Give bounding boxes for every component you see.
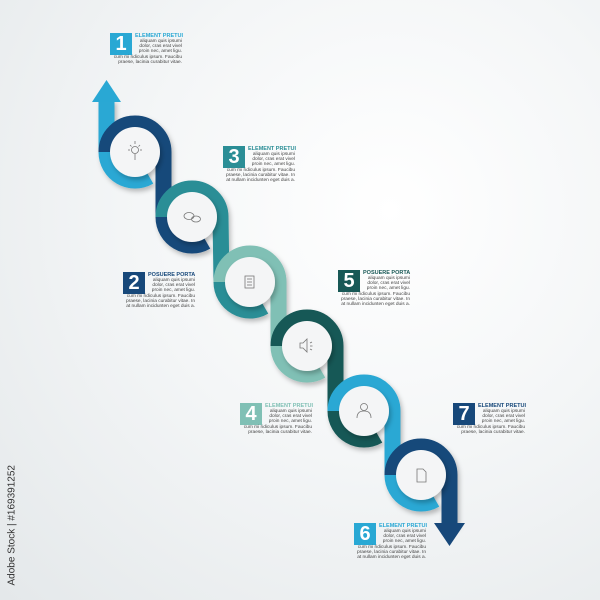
text block 7: 7: [458, 403, 470, 425]
icon: bulb: [128, 141, 142, 160]
text block 4: aliquam quis ipsumi: [270, 409, 312, 414]
text block 3: praese, lacinia curabitur vitae. In: [226, 172, 295, 178]
text block 7: praese, lacinia curabitur vitae.: [461, 430, 525, 434]
text block 3: cum mi ridiculus ipsum. Faucibu: [227, 168, 295, 172]
text block 5: [338, 270, 410, 306]
text block 7: [453, 403, 526, 434]
text block 6: dolor, cras erat vivel: [383, 534, 426, 539]
text block 6: 6: [359, 523, 371, 545]
text block 4: ELEMENT PRETUI: [265, 403, 313, 409]
text block 1: aliquam quis ipsumi: [140, 39, 182, 44]
text block 5: aliquam quis ipsumi: [368, 276, 410, 281]
text block 6: at nullam incidunten eget duis a.: [357, 554, 426, 560]
text block 1: proin nec, amet ligu.: [139, 49, 182, 54]
text block 7: aliquam quis ipsumi: [483, 409, 525, 414]
text block 3: at nullam incidunten eget duis a.: [226, 178, 295, 182]
text block 1: ELEMENT PRETUI: [135, 33, 183, 39]
text block 7: cum mi ridiculus ipsum. Faucibu: [457, 424, 525, 430]
text block 6: [354, 523, 427, 560]
icon: page: [417, 469, 426, 482]
arrow: down head: [434, 523, 465, 546]
text block 4: proin nec, amet ligu.: [269, 419, 312, 424]
text block 5: POSUERE PORTA: [363, 270, 410, 276]
text block 2: 2: [128, 272, 140, 294]
icon: person: [357, 404, 371, 418]
text block 6: aliquam quis ipsumi: [384, 529, 426, 534]
text block 5: proin nec, amet ligu.: [367, 286, 410, 291]
text block 2: aliquam quis ipsumi: [153, 278, 195, 283]
text block 2: at nullam incidunten eget duis a.: [126, 304, 195, 308]
text block 2: dolor, cras erat vivel: [152, 283, 195, 288]
text block 2: cum mi ridiculus ipsum. Faucibu: [127, 294, 195, 298]
watermark id text: Adobe Stock | #169391252: [6, 465, 18, 586]
icon: document: [245, 276, 254, 288]
text block 6: proin nec, amet ligu.: [383, 539, 426, 544]
text block 5: at nullam incidunten eget duis a.: [341, 302, 410, 306]
text block 4: [240, 403, 313, 434]
text block 4: 4: [245, 403, 257, 425]
icon: chat: [184, 212, 200, 222]
text block 3: ELEMENT PRETUI: [248, 146, 296, 152]
text block 7: dolor, cras erat vivel: [482, 414, 525, 419]
text block 6: praese, lacinia curabitur vitae. In: [357, 550, 426, 554]
text block 3: proin nec, amet ligu.: [252, 162, 295, 167]
text block 7: proin nec, amet ligu.: [482, 419, 525, 424]
text block 2: praese, lacinia curabitur vitae. In: [126, 298, 195, 304]
text block 6: ELEMENT PRETUI: [379, 523, 427, 529]
text block 1: dolor, cras erat vivel: [139, 44, 182, 49]
text block 5: cum mi ridiculus ipsum. Faucibu: [342, 292, 410, 296]
text block 5: praese, lacinia curabitur vitae. In: [341, 296, 410, 302]
text block 5: 5: [343, 270, 355, 292]
text block 3: dolor, cras erat vivel: [252, 157, 295, 162]
text block 1: cum mi ridiculus ipsum. Faucibu: [114, 54, 182, 60]
text block 3: [223, 146, 296, 182]
text block 4: dolor, cras erat vivel: [269, 414, 312, 419]
text block 3: aliquam quis ipsumi: [253, 152, 295, 157]
text block 2: [123, 272, 196, 308]
text block 4: cum mi ridiculus ipsum. Faucibu: [244, 424, 312, 430]
text block 6: cum mi ridiculus ipsum. Faucibu: [358, 544, 426, 550]
text block 5: dolor, cras erat vivel: [367, 281, 410, 286]
arrow: up head: [92, 80, 121, 102]
text block 4: praese, lacinia curabitur vitae.: [248, 430, 312, 434]
text block 2: proin nec, amet ligu.: [152, 288, 195, 293]
text block 3: 3: [228, 146, 240, 168]
text block 1: [110, 33, 183, 64]
text block 1: 1: [115, 33, 127, 55]
text block 7: ELEMENT PRETUI: [478, 403, 526, 409]
text block 2: POSUERE PORTA: [148, 272, 195, 278]
text block 1: praese, lacinia curabitur vitae.: [118, 60, 182, 64]
icon: speaker: [300, 339, 312, 352]
